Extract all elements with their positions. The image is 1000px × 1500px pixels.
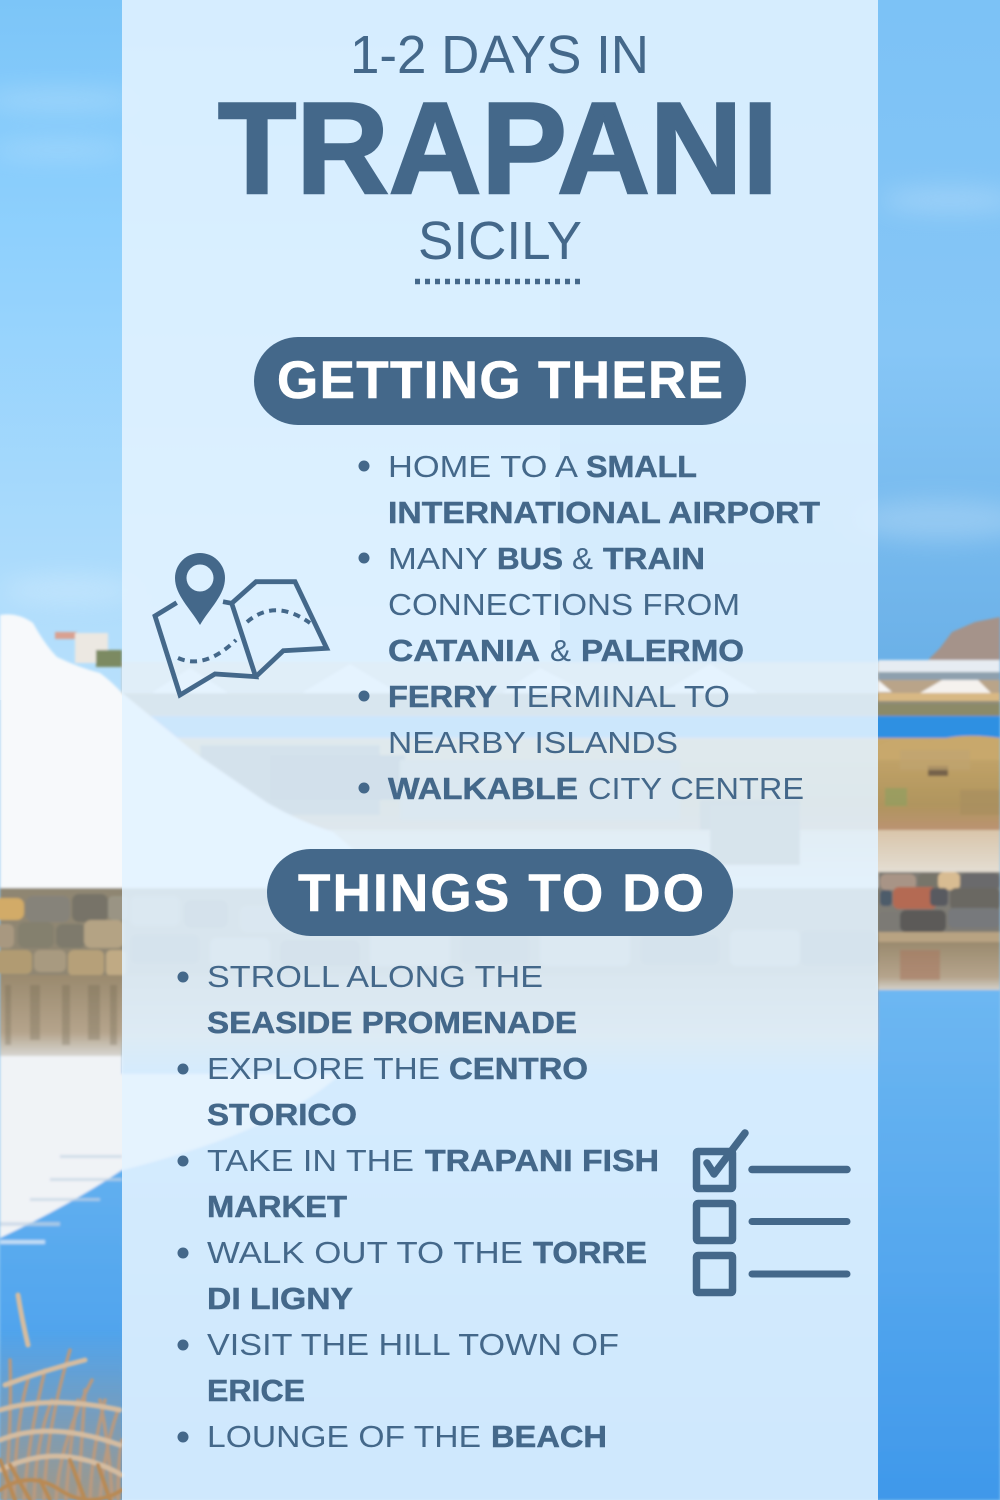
title line: 1-2 days in: 1-2 DAYS IN [350, 25, 649, 85]
heading pill: getting there [254, 337, 746, 425]
bullet list: things to do: TAKE IN THE [207, 1143, 414, 1178]
bullet list: getting there: HOME TO A [388, 449, 578, 484]
bullet list: things to do: ERICE [207, 1373, 305, 1408]
sand [122, 830, 1000, 890]
stone wall [0, 888, 1000, 976]
heading pill: things to do: THINGS TO DO [298, 864, 704, 923]
title line: Trapani: TRAPANI [218, 75, 778, 221]
bullet list: things to do: CENTRO [449, 1051, 588, 1086]
icon: checklist [696, 1133, 847, 1292]
bullet list: getting there: PALERMO [581, 633, 744, 668]
bullet list: things to do: TORRE [533, 1235, 647, 1270]
heading pill: getting there: GETTING THERE [277, 351, 723, 410]
bullet list: getting there: FERRY [388, 679, 497, 714]
bullet list: getting there: SMALL [586, 449, 697, 484]
bullet list: things to do [178, 959, 659, 1454]
bullet list: getting there: MANY [388, 541, 488, 576]
bullet list: getting there: TRAIN [603, 541, 705, 576]
far bank [122, 693, 1000, 717]
bullet list: things to do: EXPLORE THE [207, 1051, 440, 1086]
dry grass [122, 738, 1000, 833]
lagoon water [0, 1056, 122, 1500]
heading pill: things to do [267, 849, 733, 936]
bullet list: things to do: MARKET [207, 1189, 347, 1224]
bullet list: getting there: INTERNATIONAL AIRPORT [388, 495, 820, 530]
dry reeds at lower left [0, 1295, 122, 1500]
bullet list: things to do: TRAPANI FISH [425, 1143, 659, 1178]
bullet list: things to do: VISIT THE HILL TOWN OF [207, 1327, 619, 1362]
bullet list: things to do: DI LIGNY [207, 1281, 353, 1316]
bullet list: things to do: BEACH [491, 1419, 607, 1454]
mound reflection [0, 1056, 122, 1238]
title block [218, 25, 778, 271]
bullet list: things to do: STORICO [207, 1097, 357, 1132]
bullet list: getting there: & [572, 541, 593, 576]
lagoon strip [122, 716, 1000, 746]
bullet list: getting there: CONNECTIONS FROM [388, 587, 740, 622]
bullet list: things to do: SEASIDE PROMENADE [207, 1005, 577, 1040]
bullet list: things to do: STROLL ALONG THE [207, 959, 543, 994]
bullet list: getting there: CITY CENTRE [588, 771, 804, 806]
title line: Sicily: SICILY [418, 211, 582, 271]
bullet list: getting there: NEARBY ISLANDS [388, 725, 678, 760]
far mountain and town [925, 617, 1000, 668]
reflection in water [0, 975, 122, 1057]
bullet list: things to do: WALK OUT TO THE [207, 1235, 523, 1270]
bullet list: things to do: LOUNGE OF THE [207, 1419, 481, 1454]
bullet list: getting there [358, 449, 820, 806]
translucent centre panel [122, 0, 878, 1500]
salt mound [0, 614, 400, 890]
bullet list: getting there: WALKABLE [388, 771, 578, 806]
hotel buildings [55, 632, 77, 639]
bullet list: getting there: & [550, 633, 571, 668]
bullet list: getting there: BUS [497, 541, 563, 576]
bullet list: getting there: TERMINAL TO [506, 679, 730, 714]
bullet list: getting there: CATANIA [388, 633, 540, 668]
icon: folded map with location pin [155, 553, 327, 695]
